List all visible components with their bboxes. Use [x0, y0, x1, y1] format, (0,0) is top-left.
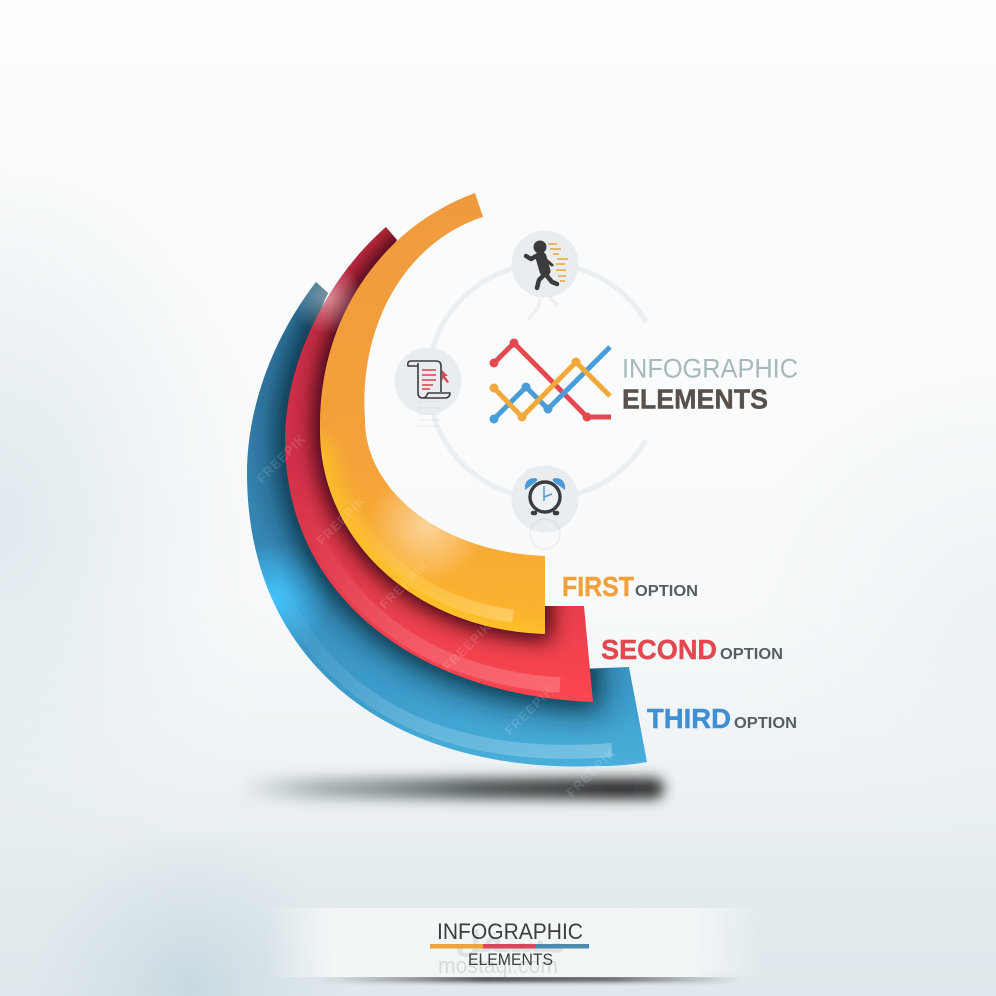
- line: orange: [490, 358, 610, 422]
- reflection: [418, 402, 440, 426]
- ring connecting icons: [428, 264, 645, 498]
- watermarks: FREEPIK: [314, 493, 369, 548]
- banner heading: INFOGRAPHIC: [437, 919, 583, 944]
- banner subheading: ELEMENTS: [468, 950, 553, 969]
- watermark: [438, 926, 565, 978]
- label: second option: OPTION: [720, 646, 783, 663]
- label: first option: OPTION: [635, 583, 698, 600]
- icon: alarm clock: [512, 466, 578, 549]
- watermarks: FREEPIK: [254, 431, 309, 486]
- logo: line chart: [490, 338, 611, 424]
- band: first option (orange): [318, 193, 550, 640]
- tricolor bar: [430, 944, 589, 948]
- line: red: [490, 338, 611, 422]
- chart: layered curved bands: [247, 193, 647, 766]
- watermarks: FREEPIK: [564, 745, 619, 800]
- bottom banner: [267, 908, 762, 982]
- title: INFOGRAPHIC: [622, 354, 798, 384]
- title: [622, 354, 798, 414]
- watermarks: FREEPIK: [440, 619, 495, 674]
- reflection: [530, 519, 560, 549]
- label: third option: [647, 703, 797, 734]
- label: second option: [601, 634, 783, 665]
- floor shadow: [240, 778, 664, 799]
- reflection: [528, 297, 558, 320]
- band: third option (blue): [247, 282, 647, 766]
- label: second option: SECOND: [601, 634, 717, 665]
- band: second option (red): [285, 193, 593, 702]
- label: first option: [562, 571, 698, 602]
- label: third option: THIRD: [647, 703, 731, 734]
- icon: scroll document: [394, 348, 462, 426]
- label: first option: FIRST: [562, 571, 634, 602]
- watermarks: FREEPIK: [502, 683, 557, 738]
- title: ELEMENTS: [622, 384, 768, 414]
- watermarks: [254, 431, 619, 800]
- watermark: مستقل: [455, 926, 565, 959]
- watermark: mostaql.com: [438, 953, 558, 978]
- icon: runner: [512, 230, 578, 320]
- line: blue: [490, 347, 610, 424]
- watermarks: FREEPIK: [377, 557, 432, 612]
- label: third option: OPTION: [734, 715, 797, 732]
